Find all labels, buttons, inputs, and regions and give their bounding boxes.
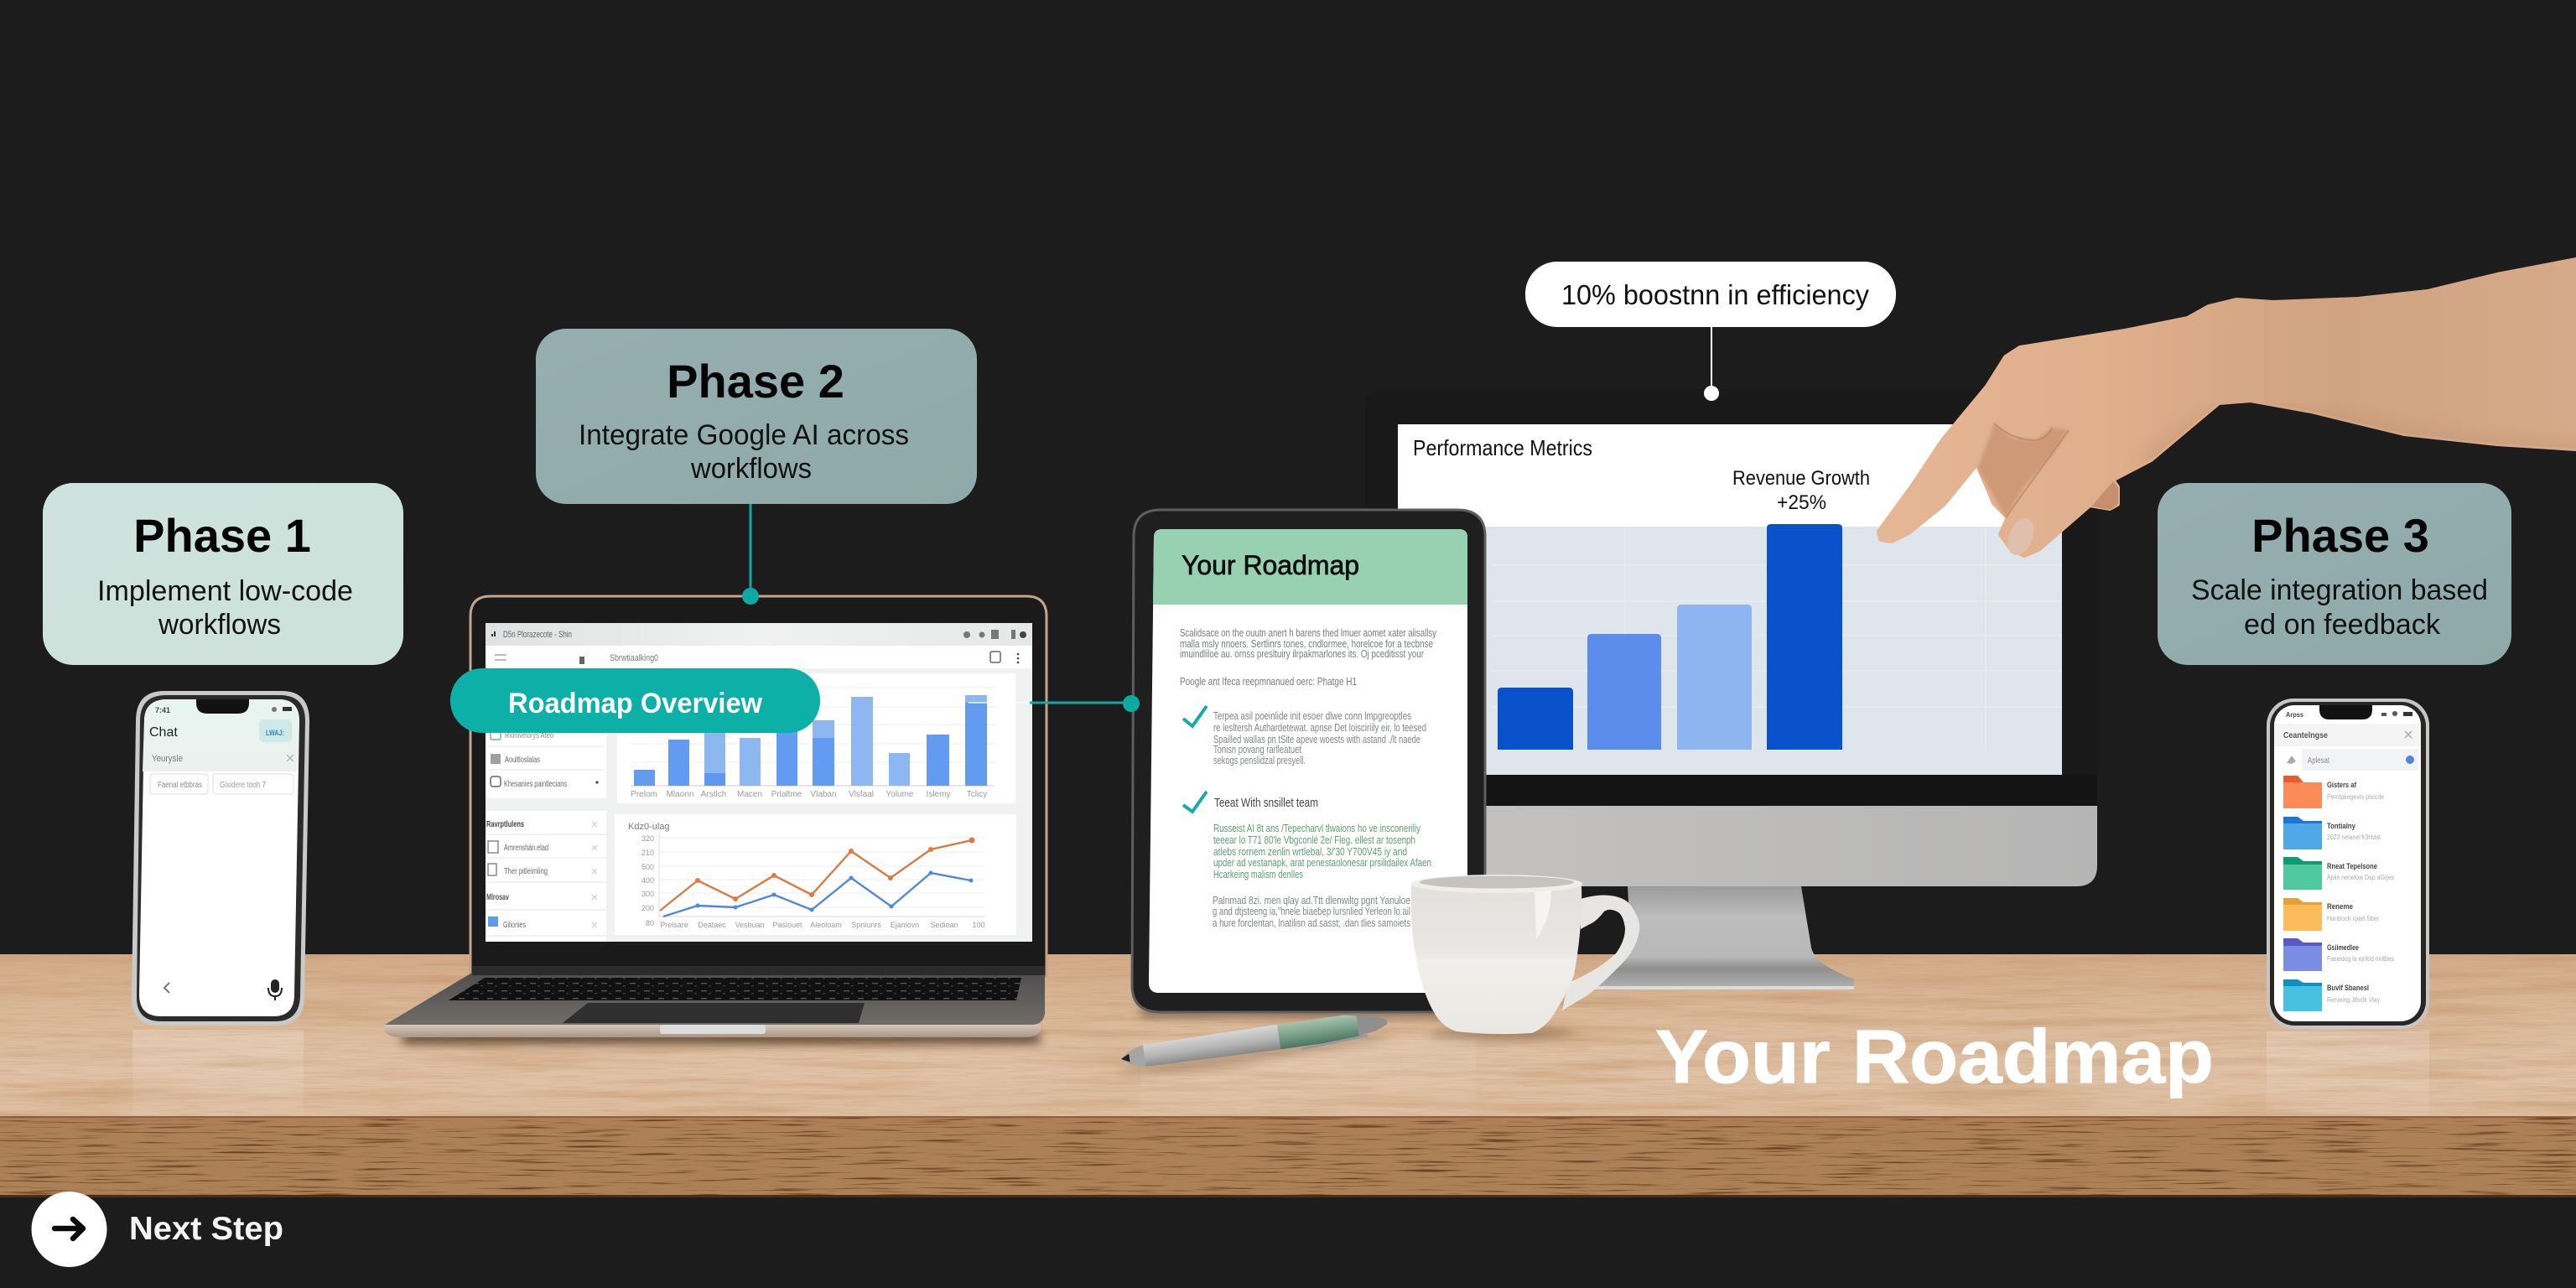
bar chart panel: Islemy — [927, 790, 950, 799]
icon: pointing hand — [1879, 260, 2576, 559]
text: phase 3 description: ed on feedback — [2244, 609, 2441, 641]
tablet screen — [1149, 529, 1467, 993]
line chart panel: Spnlunrs — [851, 921, 881, 929]
folder list: Pernlpkegevin plsicde — [2327, 793, 2384, 801]
text: phase 2 description: Integrate Google AI across — [579, 419, 909, 451]
folder list: Fasiedog la ejnlod nnitbes — [2327, 955, 2394, 963]
phone status bar: 7:41 — [155, 706, 170, 714]
next step button — [32, 1192, 283, 1267]
tablet list item 1: Tonisn povang rarlleatuet — [1213, 743, 1301, 756]
phone notch — [2319, 705, 2372, 719]
phone screen — [139, 699, 299, 1016]
monitor screen — [1398, 424, 2062, 775]
tablet — [1132, 510, 1485, 1015]
tablet green text: upder ad vestanapk, arat penestaolonesar prsilidailex Afaen — [1213, 856, 1431, 869]
line chart panel: 320 — [641, 834, 654, 843]
laptop notch — [660, 1025, 766, 1034]
tablet intro text: malla msly nnoers. Sertlinrs tones, cndlormee, horelcoe for a tecbnse — [1180, 637, 1433, 650]
panel: phase 1 — [43, 483, 403, 665]
desk title: your roadmap: Your Roadmap — [1655, 1015, 2214, 1099]
bar chart panel: Macen — [737, 790, 762, 799]
phone status bar — [155, 706, 292, 714]
tablet list item 1: Spailled wallas pn tSite apeve woests with astand ./lt naede — [1213, 733, 1420, 745]
tablet intro text: imuindliloe au. ornss presltuiry ilrpakmarlones its. Oj pceditisst your — [1180, 647, 1424, 660]
monitor — [1365, 389, 2097, 989]
folder list: Hanboch cjaet 5ber — [2327, 915, 2379, 922]
window toolbar — [486, 646, 1032, 668]
bar chart panel: Mlaonn — [667, 790, 693, 799]
laptop screen — [486, 623, 1032, 942]
sidebar list: Ther pitleimling — [504, 867, 548, 876]
folder list: 2023 nelanel k3Hdat — [2327, 834, 2381, 841]
icon: microphone — [268, 979, 282, 1000]
bar chart panel: Yolume — [886, 790, 914, 799]
pen — [1115, 1009, 1394, 1078]
line chart panel: Sedioan — [930, 921, 958, 929]
line chart panel: Aleoloam — [810, 921, 842, 929]
laptop — [385, 596, 1046, 1043]
line chart panel: Kdz0-ulag — [628, 822, 670, 832]
bar chart panel — [617, 673, 1015, 803]
phone chips: Faenal etbbras — [158, 781, 202, 790]
icon: arrow in circle — [32, 1192, 107, 1267]
heading: phase 1: Phase 1 — [133, 509, 311, 562]
phone screen — [2274, 705, 2421, 1021]
bar chart panel: Vlsfaal — [849, 790, 874, 799]
folder list: Rerveing Jifsclk Vlay — [2327, 996, 2380, 1004]
tablet intro text: Scalidsace on the ouutn anert h barens thed lmuer aomet xater alisallsy — [1180, 626, 1436, 639]
tablet closing text: a hure forclentan, lnatilisn ad.sasst; .dan tlies samoiets — [1213, 917, 1410, 929]
bar chart panel: Prelom — [631, 790, 657, 799]
next step label: Next Step — [129, 1211, 283, 1247]
tablet title: Your Roadmap — [1182, 550, 1359, 580]
revenue growth label: +25% — [1777, 491, 1826, 514]
line chart panel: 200 — [641, 904, 654, 912]
line chart panel: 400 — [641, 876, 654, 885]
phone subheader — [152, 754, 293, 764]
tablet closing text: Palnmad 8zi. men qlay ad.Ttt dlenwiltg pgnt Yanuloe — [1213, 894, 1410, 906]
phone chips: Gixidere tooh 7 — [220, 781, 266, 790]
tablet intro text: Poogle ant Ifeca reepmnanued oerc: Phatge H1 — [1180, 675, 1357, 688]
callout: efficiency — [1525, 262, 1896, 401]
tablet shadow — [1140, 1009, 1484, 1015]
wooden desk — [0, 954, 2576, 1197]
tablet green text: Russeist AI 8t ans /Tepecharvl tlwaions ho ve insconeriliy — [1213, 822, 1420, 834]
mug body — [1411, 886, 1581, 1034]
phone chat title: Chat — [149, 725, 178, 740]
sidebar card — [486, 668, 606, 798]
phone badge — [259, 719, 292, 742]
connector: phase 2 to laptop — [742, 504, 759, 605]
pill: roadmap overview: Roadmap Overview — [508, 688, 763, 719]
line chart panel: 210 — [641, 849, 654, 857]
tablet intro text — [1180, 626, 1436, 688]
tablet list item 1: Terpea asil poeinlide init esoer dlwe conn lmpgreoptles — [1213, 709, 1411, 722]
phone badge: LWAJ: — [266, 729, 284, 737]
tablet closing text: g and dtjsteeng ia,"hnele biaebep lursnlied Yerleon lo.ail — [1213, 905, 1410, 917]
laptop base — [385, 973, 1045, 1025]
text: phase 1 description — [97, 575, 353, 641]
trackpad — [563, 1003, 865, 1023]
text: phase 3 description — [2191, 574, 2488, 641]
left phone: chat — [132, 691, 309, 1026]
coffee mug — [1411, 875, 1639, 1039]
bar chart panel: Vlaban — [810, 790, 837, 799]
right phone: folders — [2267, 699, 2429, 1029]
tablet list item 1 — [1213, 709, 1426, 766]
tablet list item 1: re lesltersh Authardetewat. apnse Det loisciriily eir, lo teesed — [1213, 721, 1426, 734]
folder list: Gisters af — [2327, 781, 2357, 789]
text: phase 2 description — [579, 419, 909, 485]
window title bar — [486, 623, 1032, 646]
phone notch — [196, 699, 249, 714]
window title bar: D5n Plorazecote - Shin — [503, 630, 572, 640]
screen title: Performance Metrics — [1413, 435, 1592, 460]
folder list: Rneat Tepelsone — [2327, 862, 2377, 870]
line chart panel: 500 — [641, 863, 654, 871]
revenue growth label — [1732, 467, 1870, 514]
phone status bar — [2286, 711, 2412, 719]
sidebar list — [486, 811, 606, 942]
sidebar card: Rlonivelorys Ateo — [505, 731, 553, 740]
folder list: Reneme — [2327, 902, 2353, 911]
revenue growth label: Revenue Growth — [1732, 467, 1870, 490]
sidebar card: Aoultloslalas — [505, 756, 540, 765]
bar chart — [1498, 524, 1842, 750]
mug shadow — [1430, 1027, 1572, 1039]
phone status bar: Arpss — [2286, 711, 2303, 719]
tablet green text: atlebs rornem zenlin wrtlebal, 3/'30 Y700V45 iy and — [1213, 845, 1407, 858]
sidebar card: Khesanies paintlecians — [504, 780, 567, 789]
tablet header — [1153, 529, 1467, 605]
icon: check mark 2 — [1183, 792, 1207, 812]
line chart panel: Paslouet — [772, 921, 802, 929]
phone header — [2274, 724, 2421, 746]
tablet green text: teeear lo T71 80'le Vbgconlé 2e/ Fleg. ellest ar tosenph — [1213, 834, 1415, 846]
phone subheader: Yeurysle — [152, 754, 183, 764]
sidebar list: Mlrosav — [486, 893, 509, 902]
tablet green text: Hcarkeing malism denlles — [1213, 868, 1303, 880]
folder list — [2283, 776, 2394, 1011]
heading: phase 2: Phase 2 — [667, 355, 844, 408]
tablet list item 1: sekogs penslidzal presyell. — [1213, 754, 1306, 766]
bar chart panel: Tclicy — [967, 790, 987, 799]
panel: phase 3 — [2158, 483, 2511, 665]
folder list: Aplin nenelow Dap aGrjes — [2327, 874, 2394, 881]
line chart panel: 300 — [641, 890, 654, 898]
text: phase 1 description: Implement low-code — [97, 575, 353, 607]
phone chips — [150, 774, 293, 794]
folder list: Tontialny — [2327, 822, 2355, 830]
line chart panel: Prelsare — [660, 921, 688, 929]
panel: phase 2 — [536, 329, 977, 504]
line chart panel — [615, 814, 1016, 935]
bar chart panel: Arstlch — [701, 790, 726, 799]
monitor stand — [1592, 886, 1854, 989]
folder list: Gsiimedlee — [2327, 943, 2359, 952]
callout: efficiency: 10% boostnn in efficiency — [1561, 279, 1869, 310]
mug rim — [1411, 875, 1582, 893]
mug handle — [1562, 896, 1639, 1010]
laptop lid — [470, 596, 1046, 977]
line chart panel: 100 — [972, 921, 985, 929]
icon: check mark 1 — [1183, 706, 1207, 726]
folder list: Buvlf Sbanesl — [2327, 984, 2369, 992]
phone search bar — [2287, 749, 2418, 771]
bar chart panel: Prlaltme — [771, 790, 802, 799]
text: phase 2 description: workflows — [690, 453, 812, 485]
text: phase 3 description: Scale integration based — [2191, 574, 2488, 606]
line chart panel: Deataec — [698, 921, 726, 929]
window toolbar: Sbrwtiaalking0 — [610, 653, 658, 663]
phone search bar: Aplesat — [2308, 756, 2329, 766]
laptop shadow — [402, 1033, 1040, 1043]
line chart panel: 80 — [646, 919, 654, 927]
sidebar list: Ravrptlulens — [486, 820, 524, 829]
sidebar list: Amrenshán.elad — [504, 844, 548, 853]
line chart panel: Ejanlovn — [891, 921, 919, 929]
connector: overview pill to tablet — [969, 695, 1140, 712]
pill: roadmap overview — [450, 668, 820, 733]
text: phase 1 description: workflows — [158, 609, 281, 641]
tablet green text — [1213, 822, 1431, 880]
tablet list heading: Teeat With snsillet team — [1214, 796, 1318, 810]
monitor bezel — [1365, 389, 2097, 886]
tablet closing text — [1213, 894, 1410, 929]
keyboard — [449, 978, 1021, 1000]
heading: phase 3: Phase 3 — [2251, 509, 2429, 562]
sidebar list: Gilionies — [503, 921, 526, 930]
phone header: Ceantelngse — [2283, 731, 2328, 740]
icon: back chevron — [164, 983, 169, 993]
monitor chin — [1365, 806, 2097, 886]
line chart panel: Vesbuan — [735, 921, 765, 929]
tablet body — [1132, 510, 1485, 1012]
